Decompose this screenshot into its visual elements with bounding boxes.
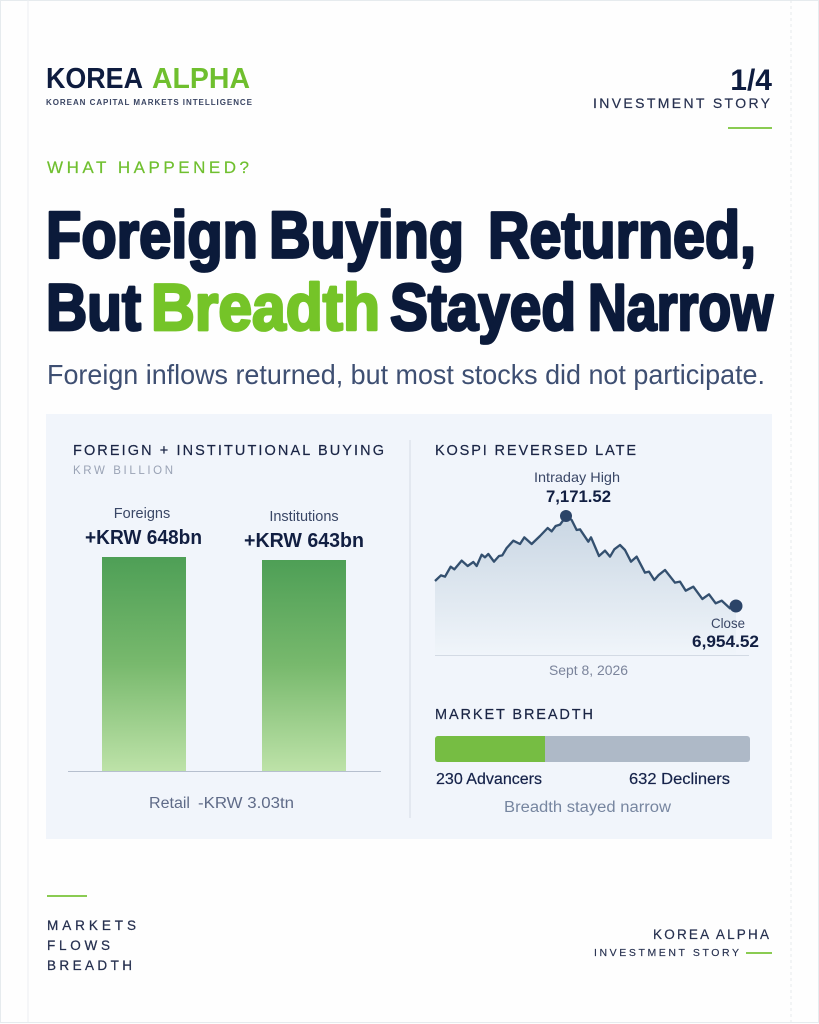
title line 1: Buying <box>269 198 464 272</box>
foreigns value: +KRW 648bn <box>85 527 202 549</box>
title line 1: Foreign <box>46 198 258 272</box>
decliners: 632 Decliners <box>629 771 730 788</box>
topic: breadth: BREADTH <box>47 958 132 973</box>
footer brand <box>594 927 772 959</box>
accent line <box>728 127 772 129</box>
topic: markets: MARKETS <box>47 918 136 933</box>
logo wordmark: ALPHA <box>152 63 250 95</box>
footer topics <box>47 895 136 973</box>
close label: Close <box>711 615 745 631</box>
breadth note: Breadth stayed narrow <box>504 799 672 816</box>
high label: Intraday High <box>534 469 620 485</box>
panel: buying bars <box>68 443 384 812</box>
title line 2: Stayed <box>390 270 576 344</box>
panel: data <box>46 414 772 839</box>
topic: flows: FLOWS <box>47 938 110 953</box>
title line 1: Returned, <box>488 198 756 272</box>
close value: 6,954.52 <box>692 632 759 651</box>
footer accent <box>746 952 772 954</box>
footer name: KOREA ALPHA <box>653 927 769 942</box>
institutions bar <box>262 560 346 771</box>
breadth heading: MARKET BREADTH <box>435 707 593 723</box>
high marker <box>560 510 572 522</box>
title line 2: Narrow <box>588 270 774 344</box>
panel: market breadth <box>435 707 750 816</box>
close marker <box>730 600 742 612</box>
retail note: -KRW 3.03tn <box>198 795 294 812</box>
header brand <box>46 63 253 107</box>
title line 2: Breadth <box>151 270 380 344</box>
title line 2: But <box>46 270 141 344</box>
chart heading: KOSPI REVERSED LATE <box>435 443 636 459</box>
eyebrow: WHAT HAPPENED? <box>47 158 249 177</box>
institutions value: +KRW 643bn <box>244 530 364 552</box>
breadth bar <box>435 736 750 762</box>
tagline: KOREAN CAPITAL MARKETS INTELLIGENCE <box>46 98 253 107</box>
date: Sept 8, 2026 <box>549 663 628 678</box>
footer series: INVESTMENT STORY <box>594 947 739 959</box>
panel: KOSPI chart <box>435 443 759 678</box>
retail note: Retail <box>149 795 190 812</box>
subtitle: Foreign inflows returned, but most stocks did not participate. <box>47 359 765 390</box>
foreigns label: Foreigns <box>114 506 170 522</box>
institutions label: Institutions <box>269 509 339 525</box>
page number: 1/4 <box>730 64 772 97</box>
series label: INVESTMENT STORY <box>593 95 771 111</box>
chart heading: FOREIGN + INSTITUTIONAL BUYING <box>73 443 384 459</box>
page indicator <box>593 64 772 129</box>
chart unit: KRW BILLION <box>73 465 173 477</box>
line chart <box>435 516 736 655</box>
high value: 7,171.52 <box>546 487 611 506</box>
foreigns bar <box>102 557 186 771</box>
advancers: 230 Advancers <box>436 771 542 788</box>
logo wordmark: KOREA <box>46 63 143 95</box>
title <box>46 198 774 344</box>
